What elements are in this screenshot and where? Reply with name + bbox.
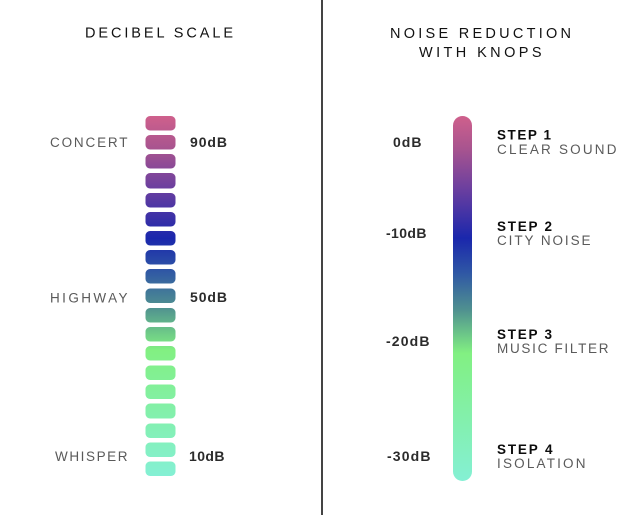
value: -30dB: -30dB bbox=[387, 448, 430, 464]
label: concert 90dB: 90dB bbox=[190, 134, 227, 150]
heading: noise reduction with knops: NOISE REDUCTION bbox=[390, 26, 571, 42]
value: -20dB: -20dB bbox=[386, 333, 430, 349]
segmented level meter bbox=[146, 116, 176, 476]
step 4 bbox=[497, 442, 586, 471]
step 1 bbox=[497, 128, 617, 157]
step 2: STEP 2 bbox=[497, 219, 552, 234]
label: whisper 10dB: WHISPER bbox=[55, 449, 128, 464]
heading: noise reduction with knops bbox=[390, 26, 571, 61]
step 2 bbox=[497, 219, 590, 248]
heading: decibel scale: DECIBEL SCALE bbox=[85, 26, 233, 42]
center divider bbox=[321, 0, 323, 515]
panel: noise reduction with knops bbox=[386, 26, 617, 481]
heading: noise reduction with knops: WITH KNOPS bbox=[419, 45, 542, 61]
step 4: ISOLATION bbox=[497, 456, 586, 471]
label: highway 50dB: HIGHWAY bbox=[50, 290, 128, 306]
step 3 bbox=[497, 327, 609, 356]
label: concert 90dB: CONCERT bbox=[50, 135, 128, 150]
value: -10dB: -10dB bbox=[386, 225, 426, 241]
label: concert 90dB bbox=[50, 134, 227, 150]
step 2: CITY NOISE bbox=[497, 233, 590, 248]
label: highway 50dB bbox=[50, 289, 227, 306]
label: whisper 10dB: 10dB bbox=[189, 448, 224, 464]
step 1: STEP 1 bbox=[497, 128, 551, 142]
panel: decibel scale bbox=[50, 26, 233, 476]
step 3: MUSIC FILTER bbox=[497, 341, 609, 356]
label: whisper 10dB bbox=[55, 448, 224, 464]
gradient reduction bar bbox=[453, 116, 472, 481]
label: highway 50dB: 50dB bbox=[190, 289, 227, 305]
step 3: STEP 3 bbox=[497, 327, 552, 342]
step 1: CLEAR SOUND bbox=[497, 142, 617, 157]
step 4: STEP 4 bbox=[497, 442, 553, 457]
value: 0dB: 0dB bbox=[393, 134, 422, 150]
